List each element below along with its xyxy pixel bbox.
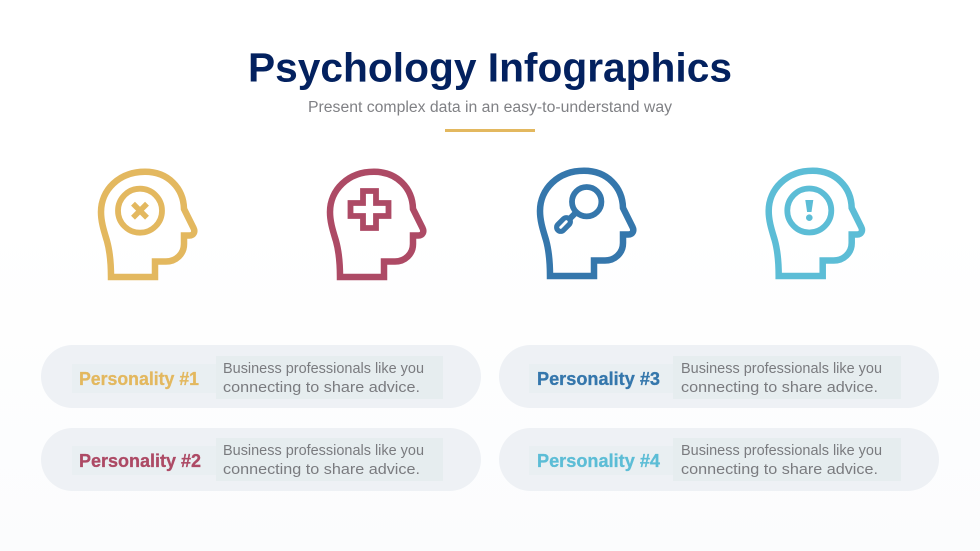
panel: personality 4 [499,428,939,491]
icon: head with exclamation mark [769,171,862,276]
icon: head with x [101,172,194,277]
subtitle: Present complex data in an easy-to-understand way [308,99,672,116]
label: personality 4: Personality #4 [537,450,661,471]
icon: head with magnifying glass [540,171,633,276]
icon: head with medical cross [330,172,423,277]
description 4, line 2: connecting to share advice. [681,462,878,478]
description 2, line 1: Business professionals like you [223,443,424,459]
label: personality 2: Personality #2 [79,450,201,471]
panel: personality 3 [499,345,939,408]
label: personality 3: Personality #3 [537,368,660,389]
description 1, line 2: connecting to share advice. [223,380,420,396]
panel: personality 1 [41,345,481,408]
description 3, line 1: Business professionals like you [681,361,882,377]
description 3, line 2: connecting to share advice. [681,380,878,396]
title accent line [445,129,535,132]
panel: personality 2 [41,428,481,491]
description 1, line 1: Business professionals like you [223,361,424,377]
label: personality 1: Personality #1 [79,368,199,389]
title: Psychology Infographics [248,44,732,90]
description 2, line 2: connecting to share advice. [223,462,420,478]
description 4, line 1: Business professionals like you [681,443,882,459]
